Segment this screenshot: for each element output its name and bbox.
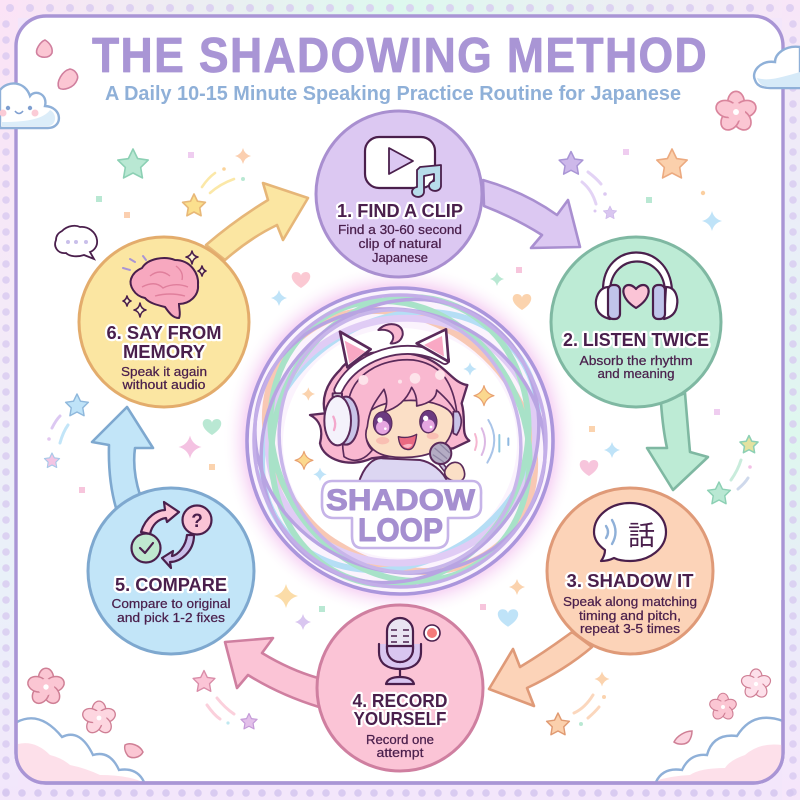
step title: 6. SAY FROM: [106, 323, 222, 343]
title: THE SHADOWING METHOD: [92, 29, 708, 83]
decorative stars and hearts right: [580, 409, 758, 504]
step description: clip of natural: [358, 236, 442, 251]
step title: MEMORY: [123, 342, 205, 362]
step title: 1. FIND A CLIP: [337, 201, 463, 221]
decorative stars and sparkles top right: [559, 149, 722, 231]
step description: [366, 732, 434, 760]
icon: speech bubble with 話: 話: [628, 514, 655, 553]
icon: headphones with heart: [596, 252, 677, 319]
step title: [352, 691, 448, 729]
step title: [106, 323, 222, 362]
arrow: step 4 to step 5: [225, 638, 319, 707]
icon: falling petals top left: [37, 40, 78, 89]
face: [364, 400, 453, 457]
step description: timing and pitch,: [579, 608, 681, 623]
step description: Japanese: [372, 250, 428, 265]
icon: brain with sparkles: [123, 251, 206, 318]
badge word: shadow: SHADOW: [326, 484, 476, 517]
arrow: step 6 to step 1: [206, 183, 308, 260]
step description: [580, 353, 692, 381]
step 6: say from memory: [79, 237, 249, 407]
icon: petal bottom right: [674, 731, 692, 744]
sparkles: [302, 387, 315, 401]
step 2: listen twice: [551, 237, 721, 407]
badge word: loop: LOOP: [358, 512, 443, 548]
hoodie: [358, 458, 448, 484]
decorative stars and sparkles top left: [96, 148, 251, 218]
step description: attempt: [376, 745, 424, 760]
mouth: [398, 434, 417, 450]
hair tuft: [378, 324, 403, 343]
arrow: step 1 to step 2: [483, 180, 580, 248]
icon: smiling cloud top left: [0, 83, 59, 128]
step title: 3. SHADOW IT: [566, 571, 694, 591]
step description: without audio: [121, 377, 206, 392]
arrow: step 2 to step 3: [647, 393, 708, 490]
bangs: [343, 360, 457, 460]
back hair: [310, 352, 469, 463]
shadow loop badge: [322, 481, 481, 548]
step 3: shadow it: [547, 488, 713, 654]
step description: repeat 3-5 times: [580, 621, 681, 636]
icon: video player with music note: [365, 137, 441, 197]
step description: Find a 30-60 second: [338, 222, 462, 237]
cat ears: [340, 332, 371, 367]
step description: [563, 594, 697, 636]
mascot: girl with cat-ear headphones and microphone: [295, 324, 508, 484]
subtitle: A Daily 10-15 Minute Speaking Practice Routine for Japanese: [105, 83, 681, 105]
icon: cloud top right: [754, 47, 800, 88]
headband: [338, 350, 445, 390]
center ring: [204, 243, 596, 639]
eyes: [373, 412, 392, 435]
icon: cherry blossoms bottom right: [708, 669, 772, 721]
step 4: record yourself: [317, 605, 483, 771]
step description: Speak it again: [121, 364, 207, 379]
step description: and pick 1-2 fixes: [117, 610, 226, 625]
arrow: step 3 to step 4: [489, 632, 592, 706]
step description: Record one: [366, 732, 434, 747]
icon: speech bubble with dots: [55, 226, 97, 259]
icon: microphone with record light: [379, 618, 440, 684]
decorative marks below the center ring: [274, 579, 525, 630]
step description: [338, 222, 462, 265]
icon: cherry blossoms bottom left: [26, 668, 117, 736]
step title: 2. LISTEN TWICE: [563, 330, 709, 350]
icon: petal bottom left: [125, 744, 143, 758]
step 1: find a clip: [316, 111, 482, 277]
step title: 5. COMPARE: [115, 575, 227, 595]
arrow: step 5 to step 6: [92, 407, 153, 508]
icon: compare arrows with check and question: ?: [191, 511, 203, 532]
step title: 4. RECORD: [352, 691, 448, 711]
step description: [121, 364, 207, 392]
step title: YOURSELF: [354, 709, 446, 729]
step description: Speak along matching: [563, 594, 697, 609]
icon: cherry blossom top right: [714, 91, 758, 134]
sound waves: [475, 420, 508, 463]
decorative hearts around the center ring: [271, 267, 531, 310]
step description: and meaning: [598, 366, 674, 381]
decorative stars and hearts left: [44, 394, 221, 493]
icon: cloud bottom right: [655, 718, 783, 782]
decorative stars bottom: [193, 670, 609, 735]
icon: speech bubble with 話: [594, 503, 666, 561]
icon: compare arrows with check and question: [132, 502, 212, 568]
step description: Absorb the rhythm: [580, 353, 692, 368]
step description: Compare to original: [112, 596, 231, 611]
icon: cloud bottom left: [17, 718, 144, 782]
microphone and hand: [440, 463, 453, 480]
step description: [112, 596, 231, 625]
panel border over the bottom clouds: [14, 600, 785, 785]
headphone cups: [333, 393, 342, 405]
step 5: compare: [88, 488, 254, 654]
